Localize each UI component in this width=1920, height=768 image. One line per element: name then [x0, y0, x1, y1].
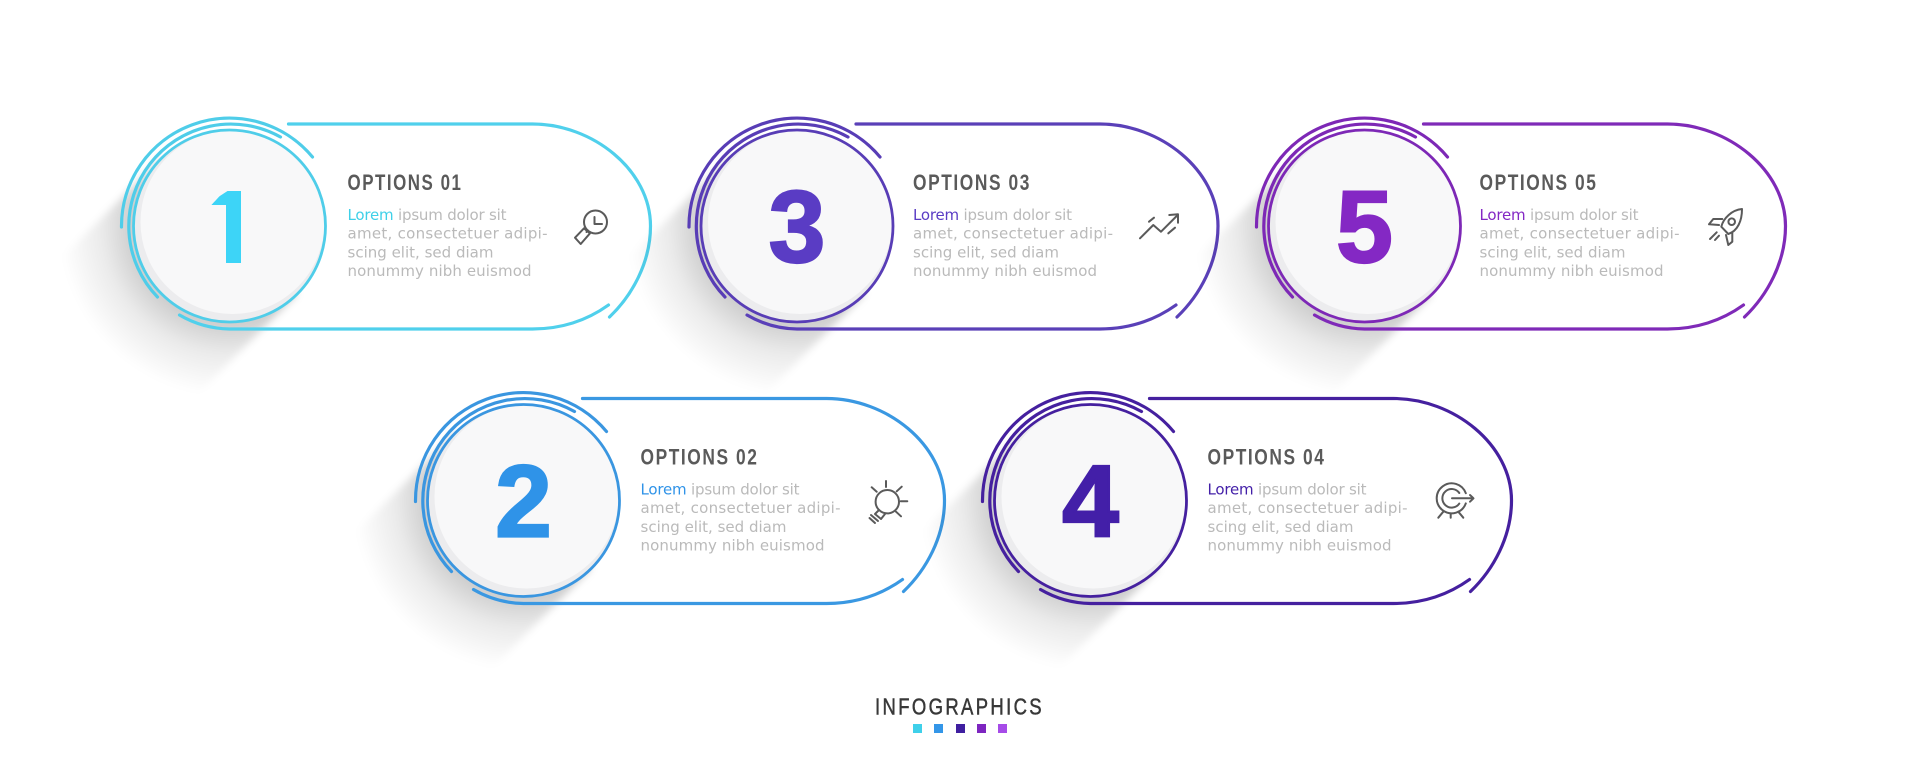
card 4: options 04	[902, 393, 1512, 688]
card 1: options 01	[80, 116, 652, 376]
body text: scing elit, sed diam	[640, 518, 786, 536]
body text: amet, consectetuer adipi-	[913, 225, 1113, 243]
concentric rings	[1256, 118, 1460, 322]
body text: nonummy nibh euismod	[348, 262, 532, 280]
body text: scing elit, sed diam	[348, 243, 494, 261]
body text: Lorem ipsum dolor sit	[348, 206, 507, 224]
concentric rings	[121, 118, 326, 322]
heading: OPTIONS 01	[348, 170, 462, 195]
footer title: INFOGRAPHICS	[875, 694, 1044, 720]
body text: scing elit, sed diam	[913, 243, 1059, 261]
pill outline	[747, 124, 1218, 329]
number 5: 5	[1336, 170, 1393, 284]
number 2: 2	[495, 444, 552, 558]
pill outline	[180, 124, 650, 329]
long shadow	[902, 432, 1158, 688]
body text: Lorem ipsum dolor sit	[640, 480, 800, 498]
heading: OPTIONS 02	[640, 444, 758, 470]
heading: OPTIONS 05	[1480, 170, 1598, 195]
number disc	[134, 130, 324, 321]
concentric rings	[982, 393, 1186, 596]
body text: Lorem ipsum dolor sit	[913, 206, 1072, 224]
body text	[640, 480, 840, 554]
long shadow	[609, 158, 865, 414]
body text	[1208, 480, 1408, 554]
body text	[348, 206, 548, 280]
body text: Lorem ipsum dolor sit	[1480, 206, 1639, 224]
body text: amet, consectetuer adipi-	[1480, 225, 1680, 243]
pill outline	[474, 398, 944, 604]
body text	[913, 206, 1113, 280]
body text: scing elit, sed diam	[1208, 518, 1354, 536]
body text: Lorem ipsum dolor sit	[1208, 480, 1367, 498]
body text: nonummy nibh euismod	[1480, 262, 1664, 280]
number 4: 4	[1062, 444, 1119, 558]
concentric rings	[689, 118, 893, 322]
body text: nonummy nibh euismod	[913, 262, 1097, 280]
pill outline	[1040, 398, 1512, 604]
heading: OPTIONS 03	[913, 170, 1031, 195]
number disc	[1270, 130, 1460, 321]
long shadow	[42, 158, 298, 414]
number 3: 3	[769, 170, 825, 284]
colour legend squares	[913, 724, 1007, 733]
body text: amet, consectetuer adipi-	[348, 225, 548, 243]
body text: nonummy nibh euismod	[1208, 536, 1392, 554]
number disc	[702, 130, 892, 321]
body text: scing elit, sed diam	[1480, 243, 1626, 261]
card 3: options 03	[609, 118, 1218, 414]
icon: light bulb	[870, 481, 907, 523]
body text: amet, consectetuer adipi-	[640, 499, 840, 517]
icon: rocket	[1709, 209, 1742, 245]
body text: nonummy nibh euismod	[640, 536, 824, 554]
number 1: 1	[204, 171, 260, 285]
heading: OPTIONS 04	[1208, 444, 1326, 470]
number disc	[996, 404, 1186, 596]
long shadow	[336, 432, 592, 688]
pill outline	[1314, 124, 1786, 329]
icon: magnifier with clock	[575, 210, 607, 244]
long shadow	[1176, 158, 1432, 414]
number disc	[428, 404, 618, 596]
concentric rings	[415, 393, 620, 596]
body text: amet, consectetuer adipi-	[1208, 499, 1408, 517]
card 2: options 02	[336, 393, 944, 688]
icon: trend arrow	[1140, 214, 1178, 238]
icon: target with arrow	[1437, 483, 1474, 518]
body text	[1480, 206, 1680, 280]
card 5: options 05	[1176, 118, 1786, 414]
